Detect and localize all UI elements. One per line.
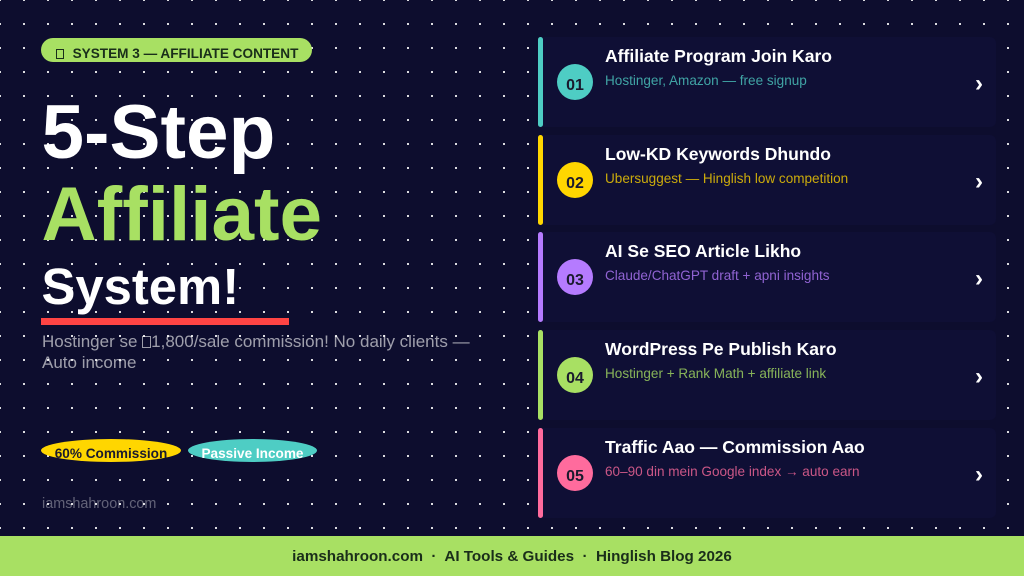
step 3 card <box>538 232 996 322</box>
pill: 60% Commission <box>41 439 181 462</box>
step 3 accent bar <box>538 232 543 322</box>
step 1 card <box>538 37 996 127</box>
step 1 title: Affiliate Program Join Karo <box>605 46 832 66</box>
step 5 number: 05 <box>566 468 584 485</box>
red underline <box>41 318 289 325</box>
step 3 number: 03 <box>566 272 584 289</box>
step 5 chevron: › <box>975 461 983 488</box>
category badge <box>41 38 312 62</box>
subtitle <box>42 332 470 372</box>
step 2 description: Ubersuggest — Hinglish low competition <box>605 171 848 186</box>
step 4 accent bar <box>538 330 543 420</box>
subtitle: Hostinger se 1,800/sale commission! No daily clients — <box>42 332 470 351</box>
title line: 5-Step: 5-Step <box>42 90 275 175</box>
footer bar <box>0 536 1024 576</box>
step 4 description: Hostinger + Rank Math + affiliate link <box>605 366 826 381</box>
step 4 title: WordPress Pe Publish Karo <box>605 339 837 359</box>
step 5 accent bar <box>538 428 543 518</box>
pill: Passive Income <box>188 439 317 462</box>
step 5 title: Traffic Aao — Commission Aao <box>605 437 865 457</box>
step 5 description: 60–90 din mein Google index → auto earn <box>605 464 860 479</box>
step 1 chevron: › <box>975 70 983 97</box>
step 2 chevron: › <box>975 168 983 195</box>
step 3 description: Claude/ChatGPT draft + apni insights <box>605 268 830 283</box>
step 2 accent bar <box>538 135 543 225</box>
step 2 title: Low-KD Keywords Dhundo <box>605 144 831 164</box>
step 1 number <box>557 64 593 100</box>
subtitle: Auto income <box>42 353 136 372</box>
footer bar: iamshahroon.com · AI Tools & Guides · Hinglish Blog 2026 <box>292 548 732 565</box>
step 1 accent bar <box>538 37 543 127</box>
title line: System!: System! <box>42 258 239 315</box>
step 4 card <box>538 330 996 420</box>
step 3 title: AI Se SEO Article Likho <box>605 241 801 261</box>
step 5 card <box>538 428 996 518</box>
step 5 number <box>557 455 593 491</box>
step 3 number <box>557 259 593 295</box>
title line: Affiliate: Affiliate <box>42 172 322 257</box>
step 2 number: 02 <box>566 175 584 192</box>
step 1 number: 01 <box>566 77 584 94</box>
step 4 chevron: › <box>975 363 983 390</box>
step 2 card <box>538 135 996 225</box>
step 2 number <box>557 162 593 198</box>
step 4 number <box>557 357 593 393</box>
pill: 60% Commission: 60% Commission <box>55 446 167 461</box>
step 4 number: 04 <box>566 370 584 387</box>
category badge: SYSTEM 3 — AFFILIATE CONTENT <box>73 46 298 61</box>
pill: Passive Income: Passive Income <box>201 446 304 461</box>
step 1 description: Hostinger, Amazon — free signup <box>605 73 807 88</box>
website label: iamshahroon.com <box>42 496 156 512</box>
step 3 chevron: › <box>975 265 983 292</box>
